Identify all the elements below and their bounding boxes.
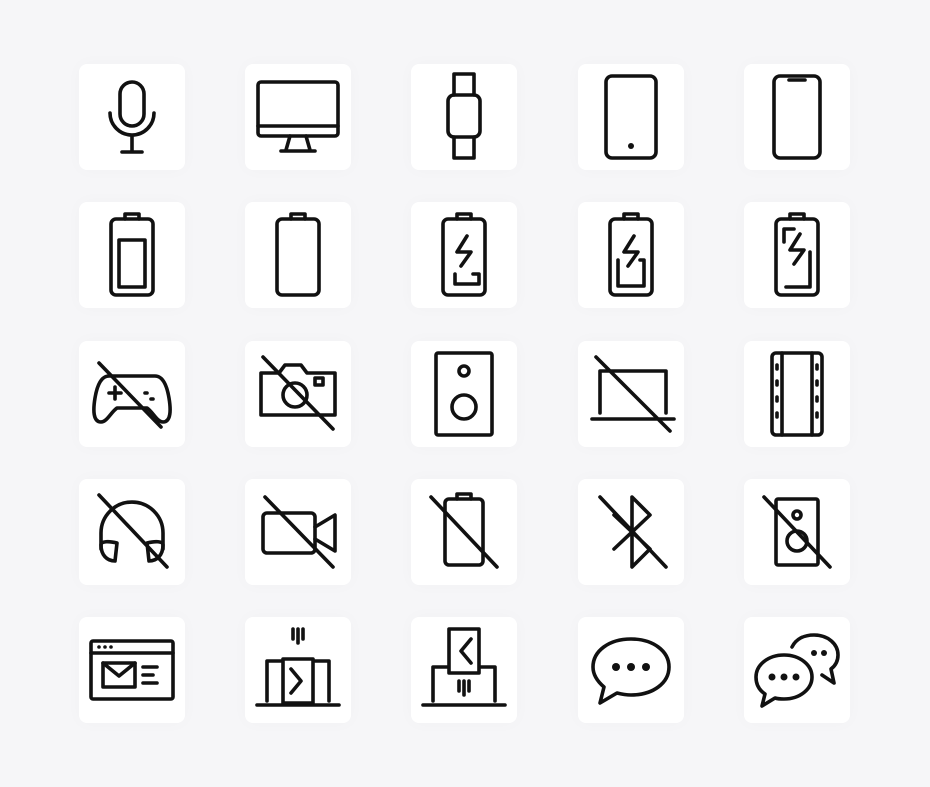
icon: speaker off [744, 479, 850, 585]
icon: battery charging full [744, 202, 850, 308]
icon: film strip [744, 341, 850, 447]
icon: battery full [79, 202, 185, 308]
icon: microphone [79, 64, 185, 170]
icon: phone notch [744, 64, 850, 170]
icon: battery off [411, 479, 517, 585]
icon: browser mail [79, 617, 185, 723]
icon: camera off [245, 341, 351, 447]
icon: speaker [411, 341, 517, 447]
icon: headphones off [79, 479, 185, 585]
icon: bluetooth off [578, 479, 684, 585]
icon: video off [245, 479, 351, 585]
icon: monitor [245, 64, 351, 170]
icon: chat bubbles [744, 617, 850, 723]
icon: laptop phone up [411, 617, 517, 723]
icon: gamepad off [79, 341, 185, 447]
icon: speech bubble [578, 617, 684, 723]
icon: laptop off [578, 341, 684, 447]
icon: laptop phone down [245, 617, 351, 723]
icon: battery charging low [411, 202, 517, 308]
icon: battery charging mid [578, 202, 684, 308]
icon: smartwatch [411, 64, 517, 170]
icon: phone [578, 64, 684, 170]
icon: battery empty [245, 202, 351, 308]
